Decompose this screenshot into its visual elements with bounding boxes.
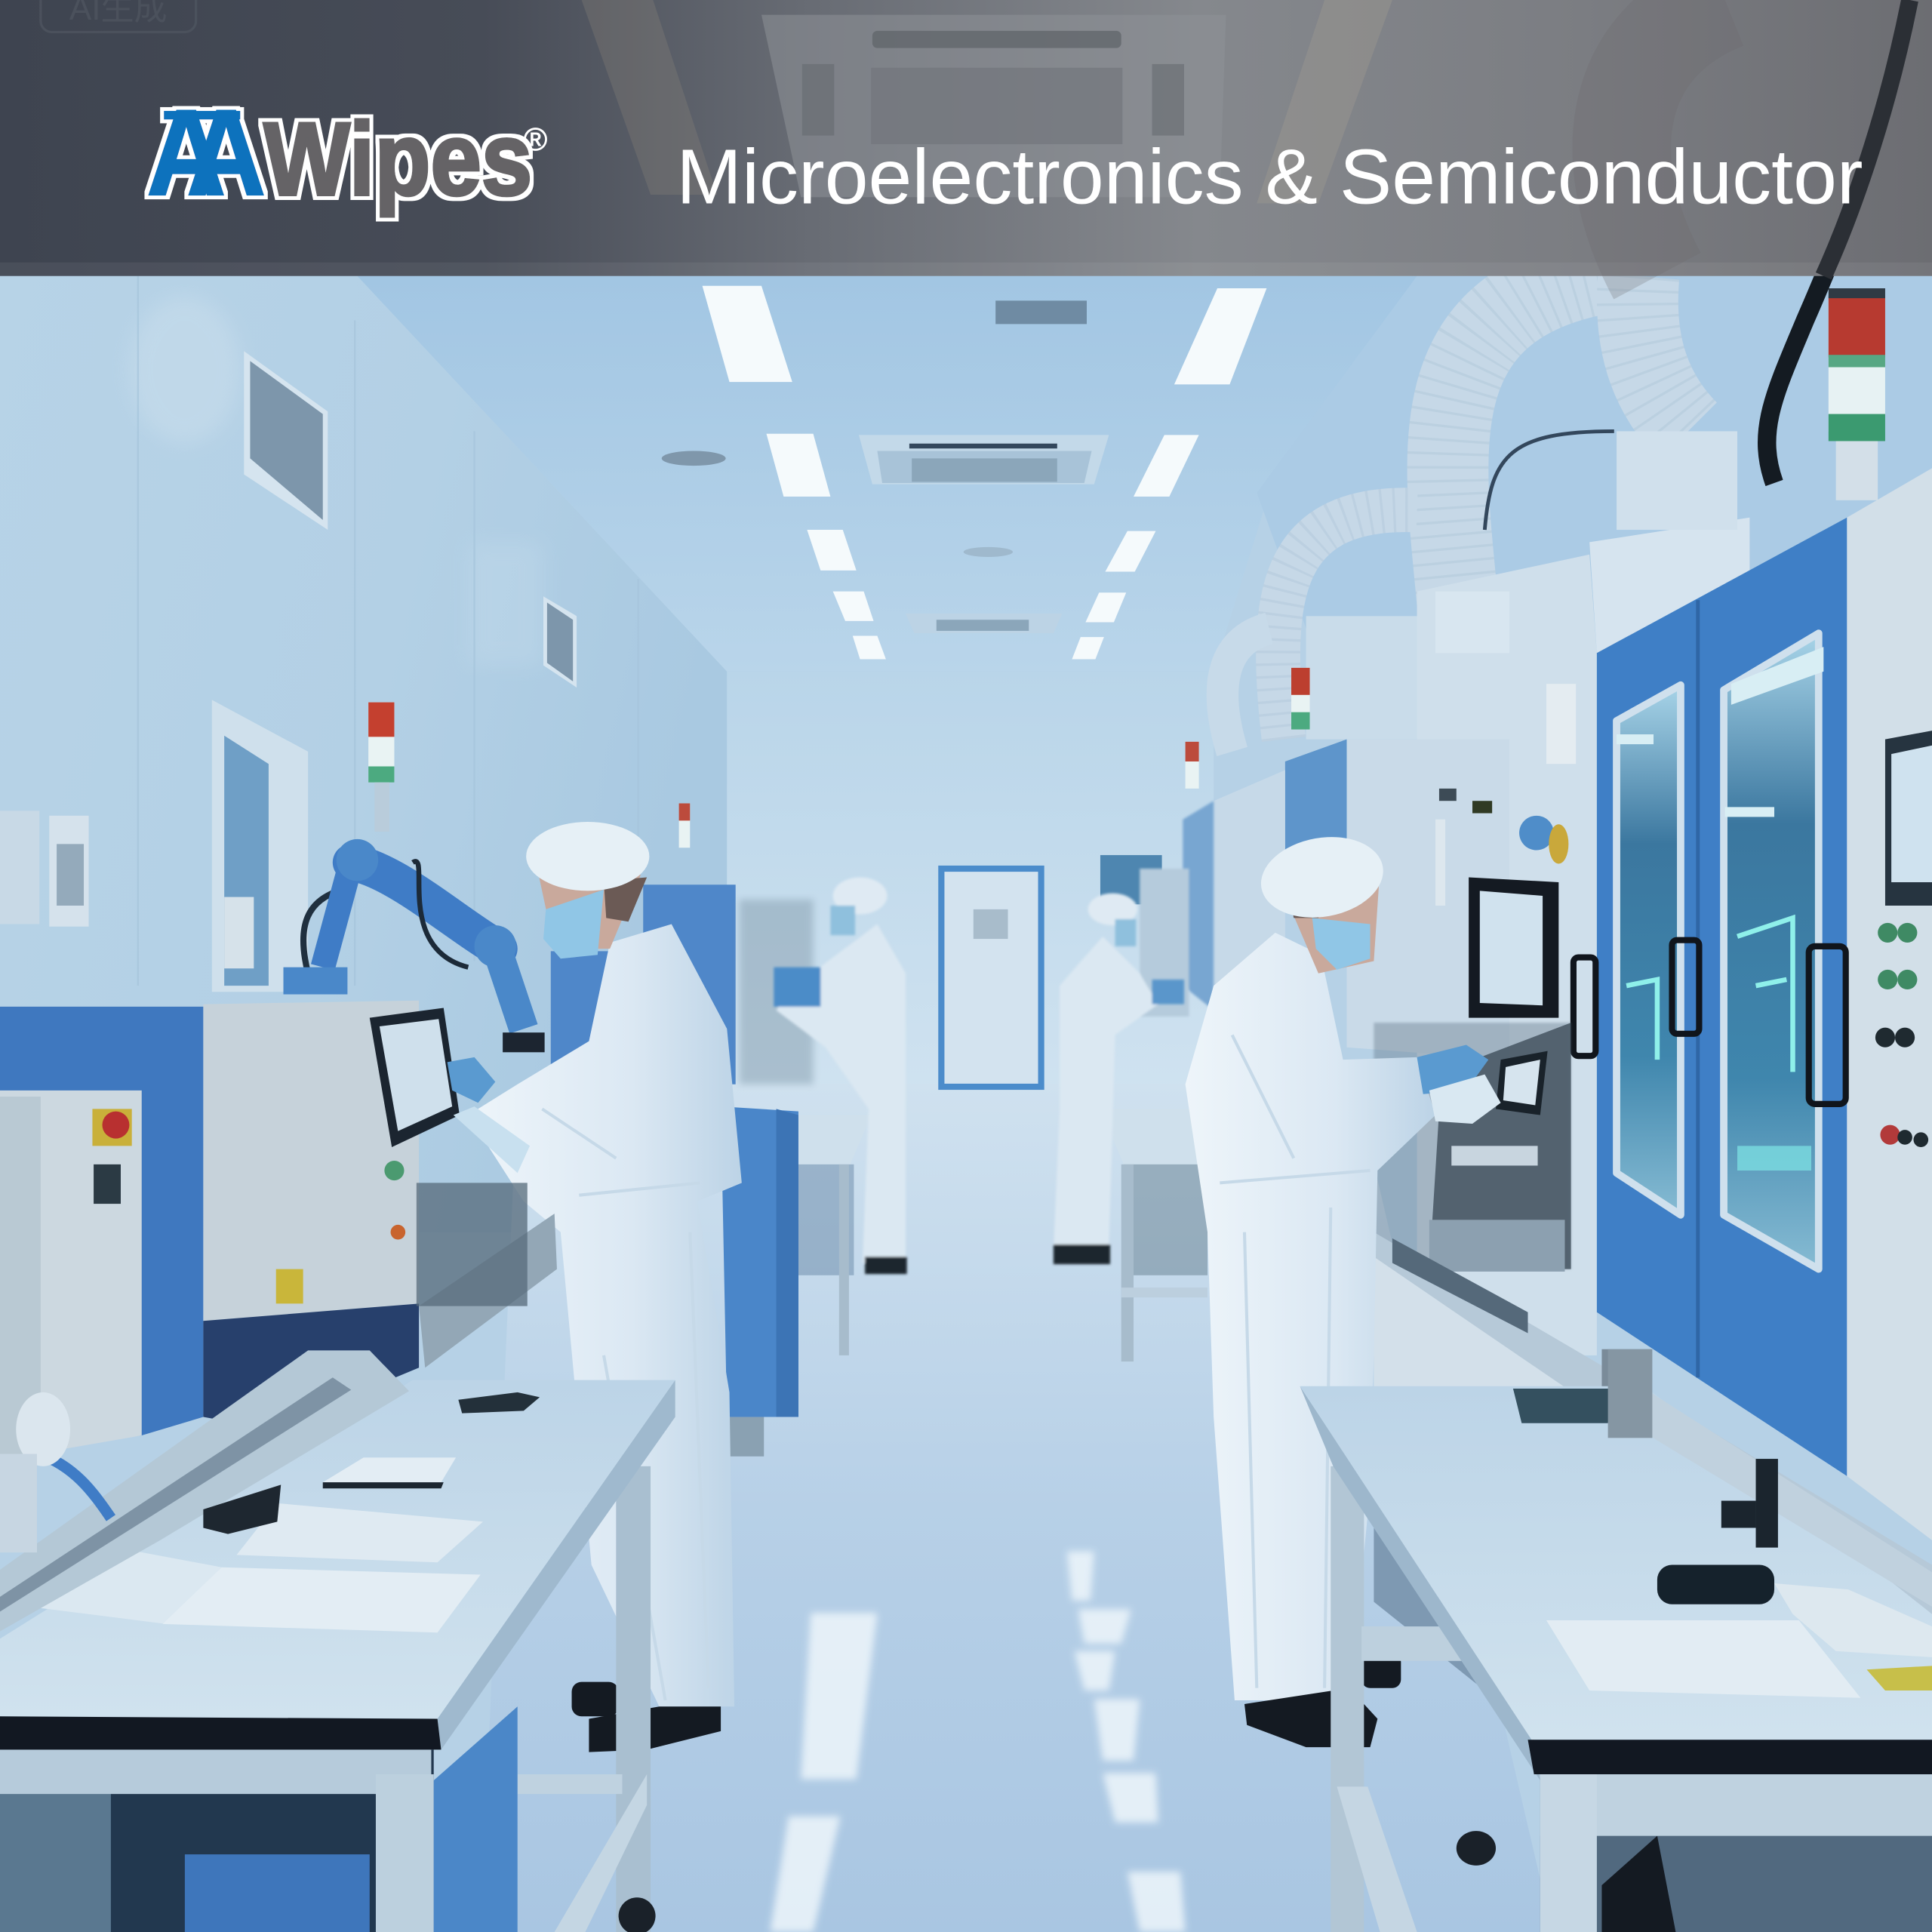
logo: AAWipes [146,85,547,221]
worker: back left [774,877,907,1274]
back door [941,855,1162,1087]
back blue cabinets [551,884,814,1457]
left monitor [370,1008,460,1147]
worker: front right [1186,828,1501,1747]
header band [0,0,1932,276]
ceiling lights [703,286,1266,659]
door handles [1574,940,1846,1104]
worker: front left [448,822,742,1752]
right control panel [1847,468,1932,1540]
title: Microelectronics & Semiconductor [676,133,1863,220]
logo mark: blue AA: AA [146,85,266,221]
black cable hose [1767,0,1910,483]
right conveyor and lower cabinet [1374,1232,1932,1725]
front left table [0,1380,675,1932]
left blue panel and grey cabinet [0,1001,419,1454]
ducts [1223,273,1688,752]
ceiling air units and vents [662,300,1109,633]
left conveyor and tube [0,1183,557,1632]
logo registered mark: ® [524,122,547,157]
front right table [1300,1386,1932,1932]
left small cabinet [0,1091,142,1460]
wall vents [244,351,577,688]
blue machine with glass doors [1597,518,1847,1476]
watermark: faint AI generated tag [41,0,196,32]
header: faded ceiling detail behind the band [582,0,1910,276]
right machine monitor and tooling [1374,877,1571,1272]
mid-aisle tables [798,1109,1208,1361]
stack lights [368,288,1885,848]
worker: back right [1054,894,1184,1264]
left wall door and notices [0,700,308,992]
robot arm [284,839,545,1052]
right rail over table [1608,1349,1932,1607]
right machine row [1140,431,1749,1355]
floor reflections [770,1552,1186,1932]
logo wordmark: Wipes: Wipes [263,102,532,217]
